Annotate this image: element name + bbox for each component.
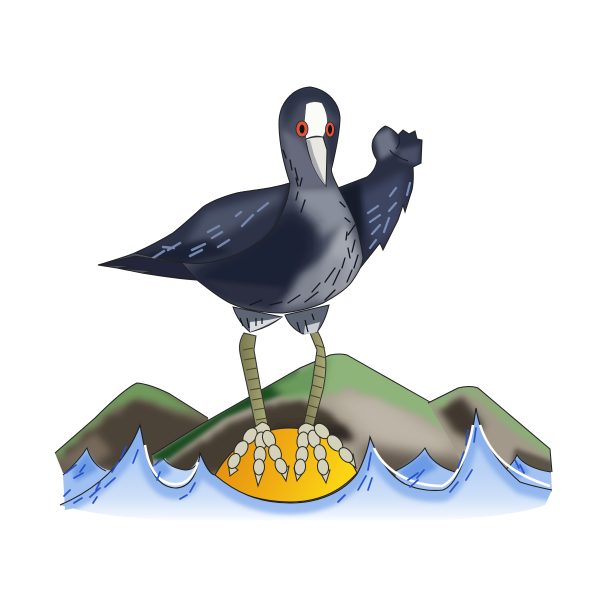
wave brush marks: [64, 428, 524, 503]
left eye: [296, 121, 308, 137]
tail feathers: [98, 256, 197, 280]
front wave: [60, 408, 552, 523]
left leg: [239, 333, 268, 428]
illustration: coot standing on sun over mountains and waves: [54, 86, 552, 520]
body and head: [98, 86, 364, 314]
white rim of the waves: [145, 425, 550, 486]
right leg: [303, 332, 326, 428]
wing feather marks: [368, 183, 410, 248]
left mountain: [54, 382, 208, 474]
right wing raised: [338, 126, 422, 269]
wing feather marks: [150, 203, 268, 260]
back wave right: [395, 448, 470, 498]
sun: [215, 428, 357, 502]
mountains: [50, 350, 556, 505]
back wave far right: [505, 455, 552, 492]
back waves: [63, 430, 552, 510]
left foot: [225, 422, 289, 486]
right mountain: [428, 386, 552, 472]
right foot: [293, 420, 356, 483]
frontal shield: [304, 102, 327, 139]
legs: [239, 332, 326, 428]
middle mountain: [152, 354, 460, 500]
thighs: [233, 305, 329, 334]
left folded wing: [134, 182, 290, 264]
breast feather marks: [250, 150, 358, 305]
beak: [306, 137, 327, 186]
right eye: [326, 122, 334, 137]
bird: [90, 80, 430, 486]
back wave left: [63, 430, 142, 510]
fist fingers: [390, 135, 408, 161]
back wave centre: [150, 453, 200, 490]
